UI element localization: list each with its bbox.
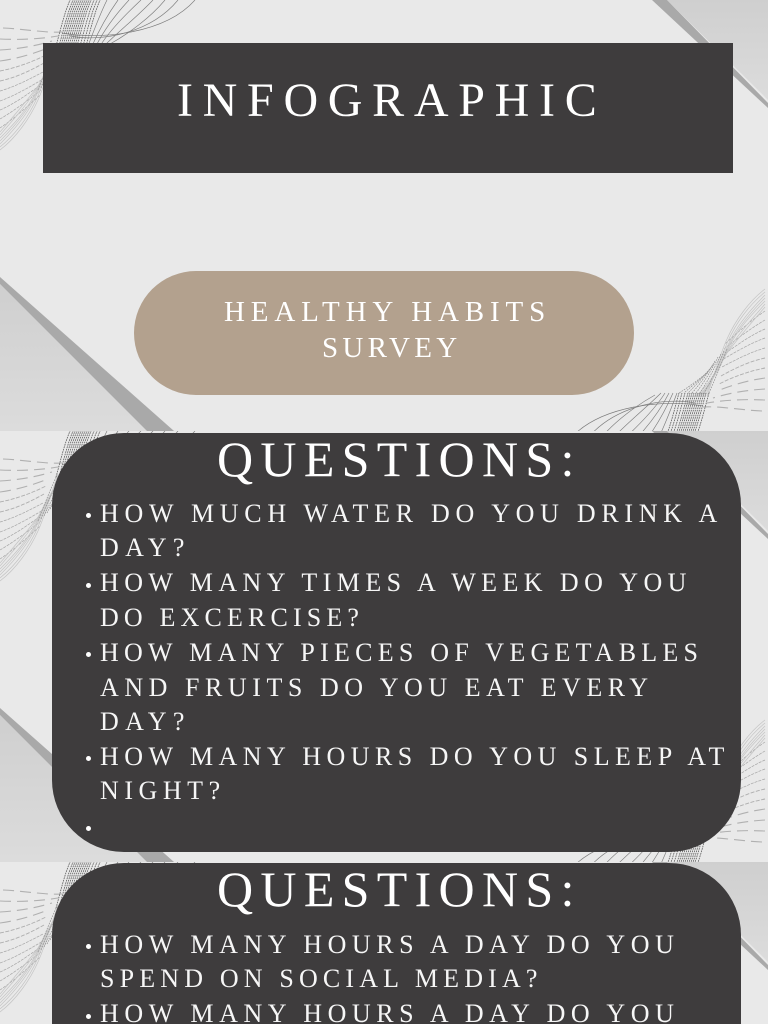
question list 1: NIGHT?: [100, 776, 226, 805]
subtitle text: SURVEY: [322, 332, 462, 364]
question list 2: SPEND ON SOCIAL MEDIA?: [100, 964, 543, 993]
question list 1: [86, 499, 730, 831]
subtitle text: [224, 296, 551, 364]
question list 2: HOW MANY HOURS A DAY DO YOU: [100, 930, 679, 959]
title banner: [43, 43, 733, 173]
title text: INFOGRAPHIC: [177, 74, 606, 127]
question list 1: AND FRUITS DO YOU EAT EVERY: [100, 673, 654, 702]
question list 1: DO EXCERCISE?: [100, 603, 364, 632]
question list 1: DAY?: [100, 707, 191, 736]
heading: questions 1: QUESTIONS:: [217, 431, 582, 487]
heading: questions 2: QUESTIONS:: [217, 861, 582, 917]
question list 1: HOW MANY TIMES A WEEK DO YOU: [100, 568, 692, 597]
panel: questions 1: [52, 433, 741, 852]
panel: questions 2: [52, 863, 741, 1024]
subtitle pill: [134, 271, 634, 395]
question list 1: HOW MUCH WATER DO YOU DRINK A: [100, 499, 723, 528]
question list 1: HOW MANY HOURS DO YOU SLEEP AT: [100, 742, 730, 771]
question list 1: HOW MANY PIECES OF VEGETABLES: [100, 638, 703, 667]
subtitle text: HEALTHY HABITS: [224, 296, 551, 328]
question list 2: [86, 930, 679, 1024]
question list 1: DAY?: [100, 533, 191, 562]
